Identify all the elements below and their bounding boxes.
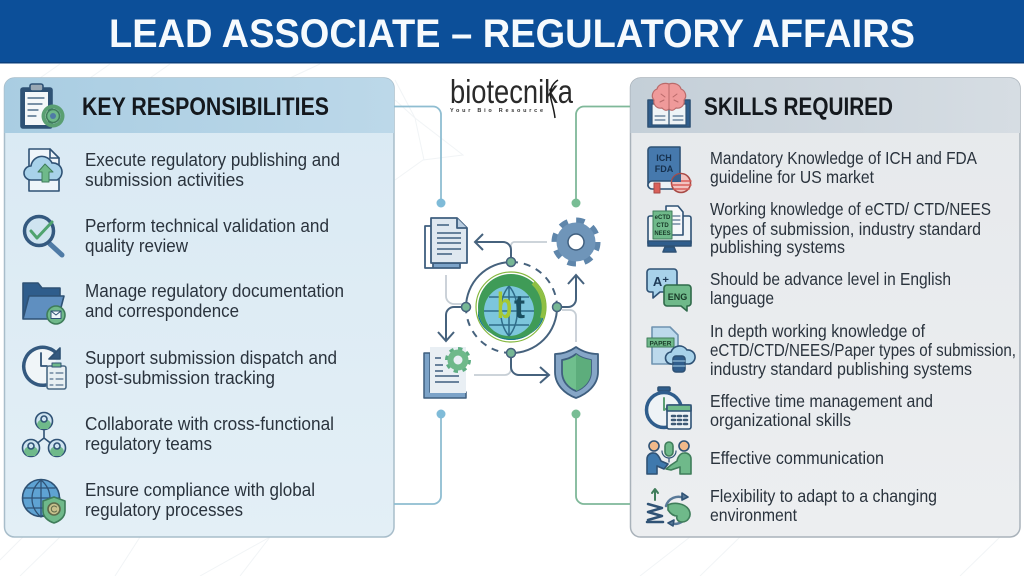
text: Effective time management and [710, 391, 933, 411]
logo: biotecnika: biotecnika [450, 73, 574, 110]
logo: bt globe [476, 272, 546, 342]
logo: biotecnika: Your Bio Resource [450, 108, 543, 114]
item: eCTD working knowledge: types of submission, industry standard [710, 219, 981, 239]
item: effective communication [647, 441, 884, 474]
icon: ICH FDA book with US flag: FDA [655, 164, 674, 174]
item: support submission dispatch [24, 347, 337, 389]
icon: folder with mail [23, 283, 65, 324]
icon: monitor with eCTD documents: NEES [654, 231, 671, 237]
icon: stopwatch and calendar [646, 387, 691, 429]
icon: connected people [22, 412, 66, 456]
icon: magnifier check [24, 216, 62, 255]
icon: gear [556, 222, 596, 262]
title: LEAD ASSOCIATE – REGULATORY AFFAIRS [109, 12, 915, 56]
heading: skills required: SKILLS REQUIRED [704, 93, 893, 121]
connector: top left [394, 106, 446, 208]
item: in depth working knowledge [647, 321, 1016, 379]
icon: document cloud upload [24, 149, 62, 191]
item: in depth working knowledge: industry standard publishing systems [710, 359, 972, 379]
icon: handshake with microphone [647, 441, 691, 474]
icon: globe with shield [22, 480, 65, 523]
connector: bottom left [394, 410, 446, 504]
icon: spring and chameleon [647, 489, 690, 526]
item: ICH and FDA [648, 147, 977, 193]
item: flexibility: environment [710, 505, 797, 525]
text: Execute regulatory publishing and [85, 150, 340, 170]
item: eCTD working knowledge: publishing systems [710, 237, 845, 257]
icon: shield [555, 347, 598, 398]
icon: clock and checklist [24, 347, 66, 389]
icon: document with gear [424, 347, 468, 398]
item: time management [646, 387, 933, 430]
icon: monitor with eCTD documents: CTD [656, 223, 669, 229]
icon: paper document with cloud database [647, 327, 695, 372]
item: perform technical validation: quality review [85, 236, 189, 256]
icon: clipboard with gear [21, 84, 62, 128]
item: execute regulatory publishing: submission activities [85, 170, 244, 190]
icon: language speech bubbles [647, 269, 691, 311]
icon: language speech bubbles: ENG [668, 292, 687, 302]
item: support submission dispatch: post-submission tracking [85, 368, 275, 388]
text: Support submission dispatch and [85, 348, 337, 368]
connector: top right [572, 106, 630, 208]
item: ensure compliance: regulatory processes [85, 500, 243, 520]
icon: ICH FDA book with US flag: ICH [656, 153, 672, 163]
connector: bottom right [572, 410, 630, 504]
item: time management: organizational skills [710, 410, 851, 430]
text: Perform technical validation and [85, 216, 329, 236]
icon: monitor with eCTD documents: eCTD [655, 215, 671, 221]
item: advanced English: language [710, 288, 774, 308]
item: collaborate with teams [22, 412, 334, 456]
panel: skills required [630, 78, 1020, 537]
item: collaborate with teams: regulatory teams [85, 434, 212, 454]
icon: paper document with cloud database: PAPER [650, 340, 672, 348]
text: Manage regulatory documentation [85, 281, 344, 301]
item: ensure compliance [22, 480, 315, 523]
logo: bt globe: b [497, 285, 512, 326]
panel: key responsibilities [4, 78, 394, 537]
icon: brain on open book [648, 83, 690, 127]
text: Flexibility to adapt to a changing [710, 486, 937, 506]
text: Effective communication [710, 448, 884, 468]
title banner [0, 0, 1024, 64]
item: execute regulatory publishing [24, 149, 340, 191]
icon: document stack [425, 218, 467, 268]
text: Working knowledge of eCTD/ CTD/NEES [710, 199, 991, 219]
logo: bt globe: t [514, 288, 525, 325]
text: Should be advance level in English [710, 269, 951, 289]
item: ICH and FDA: guideline for US market [710, 167, 874, 187]
item: manage regulatory documentation: and correspondence [85, 301, 239, 321]
icon: monitor with eCTD documents [648, 206, 691, 252]
item: advanced English [647, 269, 951, 311]
text: Collaborate with cross-functional [85, 414, 334, 434]
heading: key responsibilities: KEY RESPONSIBILITIES [82, 93, 329, 121]
item: flexibility [647, 486, 937, 526]
center cycle hub [438, 234, 584, 383]
icon: language speech bubbles: A⁺ [653, 274, 669, 289]
item: manage regulatory documentation [23, 281, 344, 324]
text: Mandatory Knowledge of ICH and FDA [710, 148, 977, 168]
item: eCTD working knowledge [648, 199, 991, 257]
icon: ICH FDA book with US flag [648, 147, 691, 193]
text: Ensure compliance with global [85, 480, 315, 500]
item: perform technical validation [24, 216, 329, 256]
text: In depth working knowledge of [710, 321, 925, 341]
